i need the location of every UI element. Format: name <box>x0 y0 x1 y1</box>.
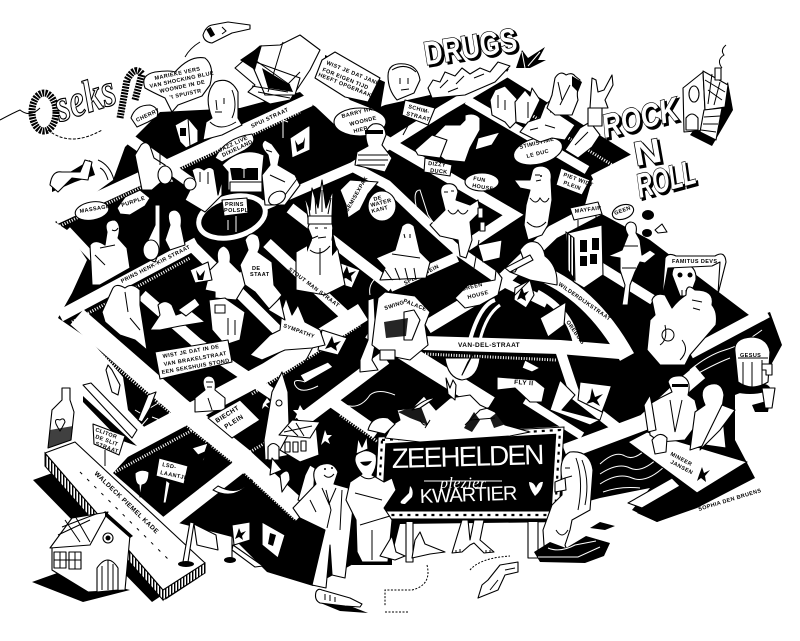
man with coffee cup and dizzy duck sign <box>415 114 500 176</box>
Mayfair building: MAYFAIR <box>574 205 602 215</box>
house and bushes top right block <box>490 86 600 158</box>
plaza sign: Prins Polsplein: POLSPLEIN <box>224 208 259 214</box>
bubble: Stimistime Le Duc: STIMISTIME <box>519 137 555 151</box>
heart bubble: Marieke Vers: 't SPUISTR <box>169 88 202 101</box>
barrel Gesus: GESUS <box>740 353 761 359</box>
title: DRUGS: DRUGS <box>423 22 522 74</box>
embracing couple <box>647 287 716 365</box>
man in De Staat shirt: STAAT <box>250 272 270 278</box>
label: Fly II: FLY II <box>514 379 534 387</box>
man in sweater <box>346 436 396 565</box>
banner: Wist je dat Janis: WIST JE DAT JANIS <box>325 60 382 88</box>
street label: Waldeck Piemel Kade: WALDECK PIEMEL KADE <box>93 470 160 536</box>
flying bottle <box>185 22 250 57</box>
street labels left: CHEMIE <box>278 211 284 235</box>
small objects <box>642 210 667 237</box>
man in suit <box>293 464 355 588</box>
bubble: Wist je dat in de van Brakelstraat: VAN BRAKELSTRAAT <box>163 351 228 368</box>
bottle and splash <box>106 365 160 425</box>
shapes in black blocks <box>192 443 290 494</box>
sign: Chim Straat: SCHIM- <box>407 104 430 116</box>
heart bubble: Marieke Vers: VAN SHOCKING BLUE <box>149 70 215 90</box>
heart bubble: Marieke Vers: MARIEKE VERS <box>154 66 201 82</box>
man with coffee cup and dizzy duck sign: DUCK <box>430 168 448 176</box>
title: Rock n Roll: ROLL <box>634 155 702 208</box>
wine glass <box>135 470 149 497</box>
banner: Wist je dat Janis: FOR EIGEN TIJD <box>321 67 369 91</box>
glass near barrel <box>752 388 775 412</box>
bubbles: Massage and Purple: MASSAGE <box>79 204 110 215</box>
small street stub with shadow <box>83 383 137 446</box>
bubble: Jazz Live: DIXIELAND <box>221 139 254 159</box>
cross-legged woman <box>376 214 430 280</box>
title: DRUGS: DRUGS <box>421 21 520 72</box>
church <box>262 362 332 462</box>
sign: Piet Wiedt Plein: PIET WIDT <box>562 172 594 189</box>
bubble: Cherry: CHERRY <box>135 108 161 124</box>
man in De Staat shirt <box>240 234 282 310</box>
black city mass <box>55 68 782 586</box>
street label: Speed weinstraat: SPEED WEIN <box>403 264 440 287</box>
sign title text: ZEEHELDEN <box>391 439 545 474</box>
singers group <box>184 168 222 212</box>
music stage <box>222 152 264 192</box>
street labels left <box>120 107 612 346</box>
bubble: Wist je dat in de van Brakelstraat <box>155 340 232 379</box>
fallen bottle <box>316 589 368 613</box>
bubble: Green House: HOUSE <box>467 290 489 301</box>
plaza sign: Prins Polsplein <box>222 198 259 232</box>
table Mineer Jansen <box>628 432 747 493</box>
bubble: Jazz Live: JAZZ LIVE <box>218 135 249 154</box>
sign: Chim Straat <box>402 100 435 135</box>
guitarist <box>262 140 320 208</box>
sign: Biecht plein: PLEIN <box>223 414 245 431</box>
bushes and leaf under Drugs <box>428 47 546 98</box>
sign subtitle: plezier <box>439 475 487 492</box>
bubble: Stimistime Le Duc: LE DUC <box>526 149 550 160</box>
flag at sympathy <box>305 330 347 362</box>
man with sunglasses <box>355 124 392 172</box>
figure reclining <box>150 298 205 330</box>
title: Rock n Roll: ROLL <box>632 153 700 206</box>
man in De Staat shirt: DE <box>252 266 260 272</box>
legs behind the sign <box>452 520 494 553</box>
street sign: LSD-laantje: LAANTJE <box>160 470 188 482</box>
bubble: De Water Kant: KANT <box>371 205 389 215</box>
man with coffee cup and dizzy duck sign: DIZZY <box>428 161 446 169</box>
sign: Clitor de slit straat: DE SLIT <box>94 434 119 448</box>
couple at bottom left block <box>102 285 147 350</box>
table Mineer Jansen: MINEER <box>669 451 693 468</box>
title: seks with fuzzy rings and chain: seks <box>47 64 122 132</box>
man in the confession booth <box>195 376 225 412</box>
man with hookah and instrument <box>135 125 174 190</box>
street labels left: OREBUIS <box>564 320 585 346</box>
label: Swing palace: SWING <box>384 300 405 312</box>
heart bubble: Marieke Vers <box>144 58 215 112</box>
bubble: Barry Hay: BARRY HAY <box>341 106 377 120</box>
barrel Gesus <box>730 337 772 394</box>
heart bubble: Marieke Vers: WOONDE IN DE <box>159 79 206 95</box>
dominatrix figure <box>415 184 485 258</box>
credit: Sophia den Bruens: SOPHIA DEN BRUENS <box>698 488 762 513</box>
table Mineer Jansen: JANSEN <box>669 459 694 476</box>
bikini woman <box>514 166 552 240</box>
banner: Wist je dat Janis <box>315 52 385 112</box>
Waldeck Piemelkade quay <box>33 442 205 602</box>
flags at the quay end <box>178 522 285 569</box>
horn <box>50 160 114 192</box>
bush with hand and leaf above the sign <box>385 378 530 442</box>
band members centre-left <box>190 246 255 300</box>
bald man smoking <box>505 242 557 285</box>
rock hand <box>588 75 613 126</box>
rock flag <box>283 120 310 165</box>
sign KWARTIER: KWARTIER <box>419 483 518 508</box>
leaf: Semisexpak <box>340 176 378 218</box>
bubbles: Massage and Purple: PURPLE <box>121 196 146 209</box>
street labels left: PRINS HENK-KIR STRAAT <box>120 244 192 285</box>
bubble: Barry Hay: HIER <box>353 126 369 135</box>
banner: Wist je dat Janis: HEEFT OPGERAAKT <box>317 72 376 101</box>
Flag with leaf <box>325 262 360 288</box>
flames beside Piet Wiedt sign <box>588 180 632 208</box>
banner: waves and plank <box>600 330 762 522</box>
skeleton with banner <box>662 254 726 300</box>
ship <box>235 35 320 104</box>
bubble: Geen <box>610 202 636 222</box>
sign: Piet Wiedt Plein <box>555 168 594 215</box>
bubble: Barry Hay <box>334 106 386 136</box>
bubbles: Massage and Purple <box>74 190 150 223</box>
bubble: De Water Kant: DE <box>373 195 383 203</box>
woman beside the sign <box>543 452 593 560</box>
bubble: Wist je dat in de van Brakelstraat: EEN SEKSHUIS STOND <box>161 358 230 376</box>
title: Rock n Roll: N <box>631 132 665 174</box>
bubble: Green House: GREEN <box>461 282 483 293</box>
title: Rock n Roll: ROCK <box>600 92 686 147</box>
hat on black <box>368 418 395 434</box>
street sign: LSD-laantje: LSD- <box>162 462 177 471</box>
title: seks with fuzzy rings and chain <box>0 64 142 139</box>
street labels left: STOUT MAN STRAAT <box>287 267 340 309</box>
devil creature Sympathy: SYMPATHY <box>282 323 315 340</box>
couple at left <box>90 220 130 285</box>
sign: Clitor de slit straat <box>93 424 125 466</box>
bikini woman with shrug <box>608 222 656 305</box>
sign: Clitor de slit straat: STRAAT <box>94 441 119 455</box>
castle and hookah <box>360 278 430 372</box>
street labels left: SPUI STRAAT <box>250 107 290 130</box>
bubble: Geen: GEEN <box>614 205 632 217</box>
sign: Biecht plein <box>208 400 260 438</box>
plaza sign: Prins Polsplein: PRINS <box>225 202 244 208</box>
sign: Clitor de slit straat: CLITOR <box>94 427 118 441</box>
Mayfair building <box>566 202 603 288</box>
puddle <box>534 522 615 563</box>
bubble: Fun House <box>465 173 499 193</box>
street label: Van-Del-Straat: VAN-DEL-STRAAT <box>458 342 520 349</box>
bubble: De Water Kant: WATER <box>370 198 392 209</box>
bubble: De Water Kant <box>368 191 396 221</box>
house top right <box>683 45 733 146</box>
couple at the table <box>644 376 735 454</box>
sign: Biecht plein: BIECHT <box>214 405 241 425</box>
van del straat arch details <box>445 300 520 380</box>
sign: Zeehelden Plezier Kwartier <box>374 427 564 562</box>
street labels left: WILDERDIJKSTRAAT <box>557 282 612 323</box>
bubble: Fun House: FUN <box>473 176 486 184</box>
leaf: Semisexpak: SEMISEXPAK <box>345 176 370 213</box>
bubble: Stimistime Le Duc <box>511 132 565 170</box>
sign: Piet Wiedt Plein: PLEIN <box>562 180 581 192</box>
woman with hair top centre <box>388 64 420 100</box>
castle and hookah: PALACE <box>402 298 427 313</box>
bubble: Cherry <box>131 105 161 127</box>
title: Rock n Roll: ROCK <box>598 90 684 145</box>
house by the heart <box>175 118 198 148</box>
bubble: Barry Hay: WOONDE <box>349 115 377 128</box>
sign: Chim Straat: STRAAT <box>405 111 431 123</box>
street network <box>55 72 767 525</box>
building centre left <box>209 298 245 345</box>
street sign: LSD-laantje <box>156 458 188 503</box>
bubble: Jazz Live <box>215 134 254 162</box>
bubble: Fun House: HOUSE <box>472 183 494 193</box>
bottle with heart <box>48 388 74 448</box>
title: Rock n Roll: N <box>633 134 667 176</box>
house bottom left <box>32 511 133 602</box>
street label: Speed weinstraat: STRAAT <box>423 268 448 285</box>
bubble: Wist je dat in de van Brakelstraat: WIST JE DAT IN DE <box>162 344 220 360</box>
Indian chief <box>296 180 345 295</box>
skeleton with banner: FAMITUS DEVS <box>672 259 717 265</box>
beer bottle <box>298 465 315 505</box>
hugging couple <box>547 73 582 115</box>
hookah and man <box>143 205 185 262</box>
bubble: Green House <box>455 270 502 308</box>
devil creature Sympathy <box>250 298 325 360</box>
river path with fish <box>380 532 518 612</box>
microphone and cable <box>294 362 395 406</box>
woman singing by the heart <box>203 80 242 140</box>
leaf diamond and flag <box>474 240 566 337</box>
Fly II sleeve and flag <box>497 360 612 425</box>
title: Rock n Roll <box>598 90 702 208</box>
